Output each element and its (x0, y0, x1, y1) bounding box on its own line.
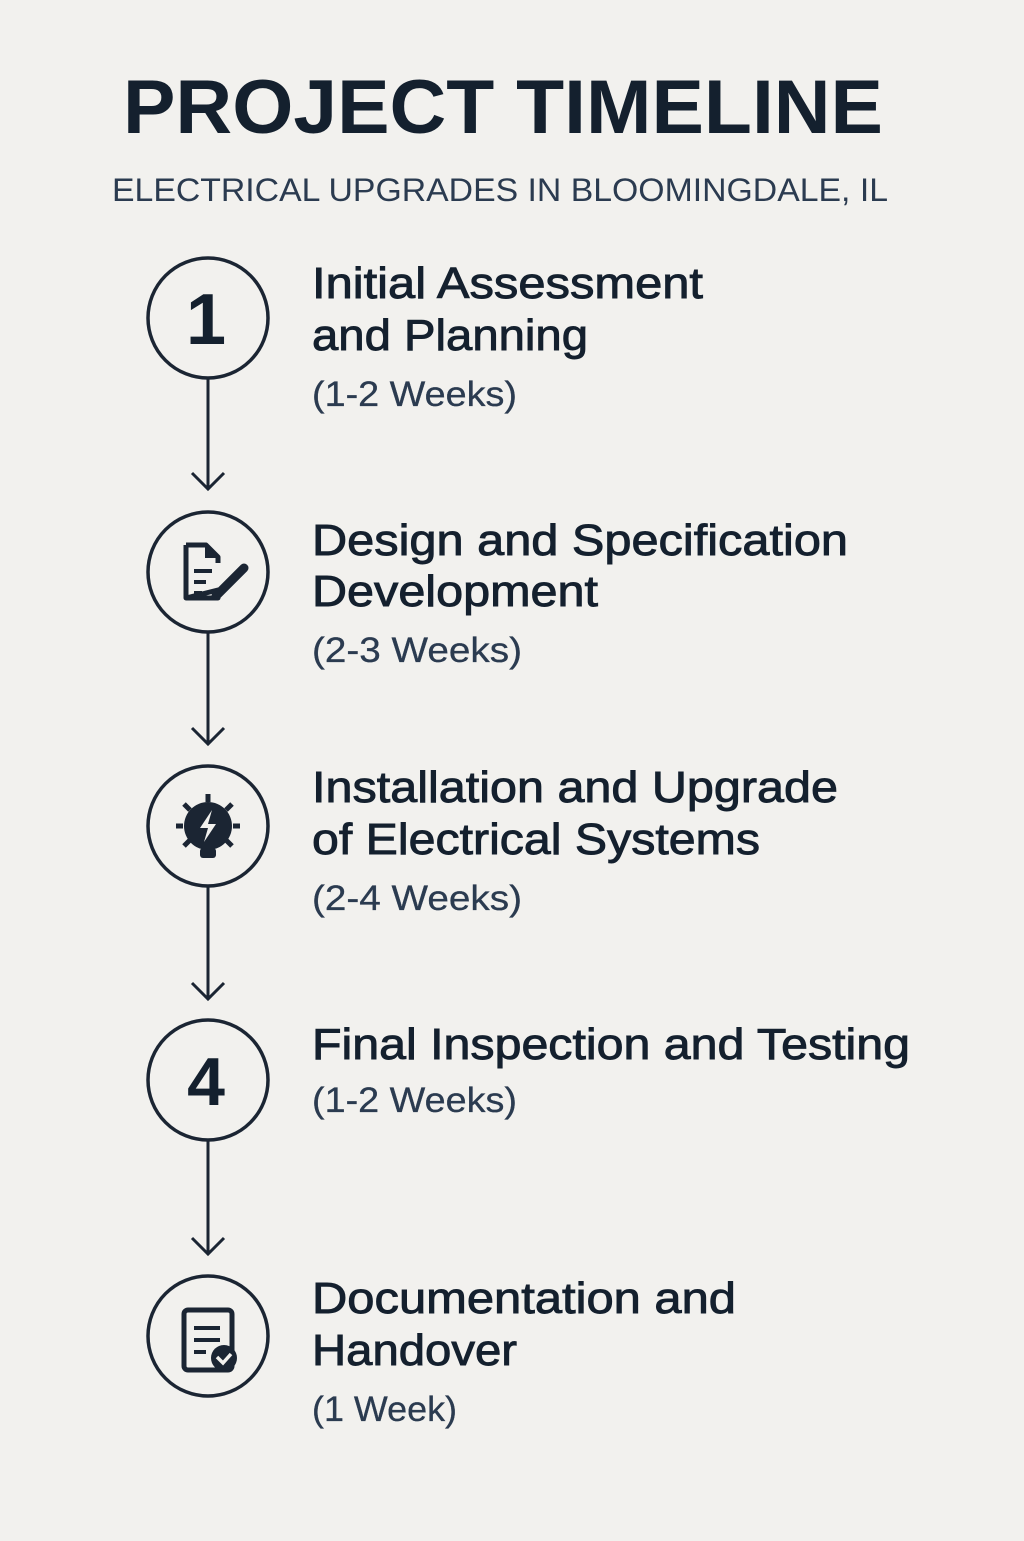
step 1 text: Initial Assessment (312, 259, 703, 308)
step 3 (148, 763, 838, 918)
step 4 (148, 1020, 910, 1140)
step 5 text: (1 Week) (312, 1390, 457, 1429)
subtitle: ELECTRICAL UPGRADES IN BLOOMINGDALE, IL (112, 172, 888, 208)
step 4 text: Final Inspection and Testing (312, 1020, 910, 1069)
step 2 text: (2-3 Weeks) (312, 631, 522, 670)
icon: number 4 circle: 4 (187, 1044, 225, 1120)
step 3 text: Installation and Upgrade (312, 763, 838, 812)
step 2 text: Design and Specification (312, 516, 848, 565)
step 1 text (312, 259, 703, 414)
title: PROJECT TIMELINE (123, 65, 883, 150)
step 4 text (312, 1020, 910, 1120)
step 3 text (312, 763, 838, 918)
step 3 text: (2-4 Weeks) (312, 879, 522, 918)
step 1 (148, 258, 703, 414)
step 2 (148, 512, 848, 670)
step 5 (148, 1274, 736, 1429)
step 2 text: Development (312, 567, 598, 616)
step 2 text (312, 516, 848, 670)
step 1 text: and Planning (312, 311, 588, 360)
step 5 text: Handover (312, 1326, 517, 1375)
step 5 text (312, 1274, 736, 1429)
icon: document with check (148, 1276, 268, 1396)
icon: number 1 circle: 1 (186, 280, 226, 360)
step 4 text: (1-2 Weeks) (312, 1081, 517, 1120)
timeline connectors (192, 379, 224, 1254)
icon: document with pencil (148, 512, 268, 632)
icon: lightbulb with bolt (148, 766, 268, 886)
icon: number 1 circle (148, 258, 268, 378)
step 3 text: of Electrical Systems (312, 815, 760, 864)
step 1 text: (1-2 Weeks) (312, 375, 517, 414)
step 5 text: Documentation and (312, 1274, 736, 1323)
icon: number 4 circle (148, 1020, 268, 1140)
